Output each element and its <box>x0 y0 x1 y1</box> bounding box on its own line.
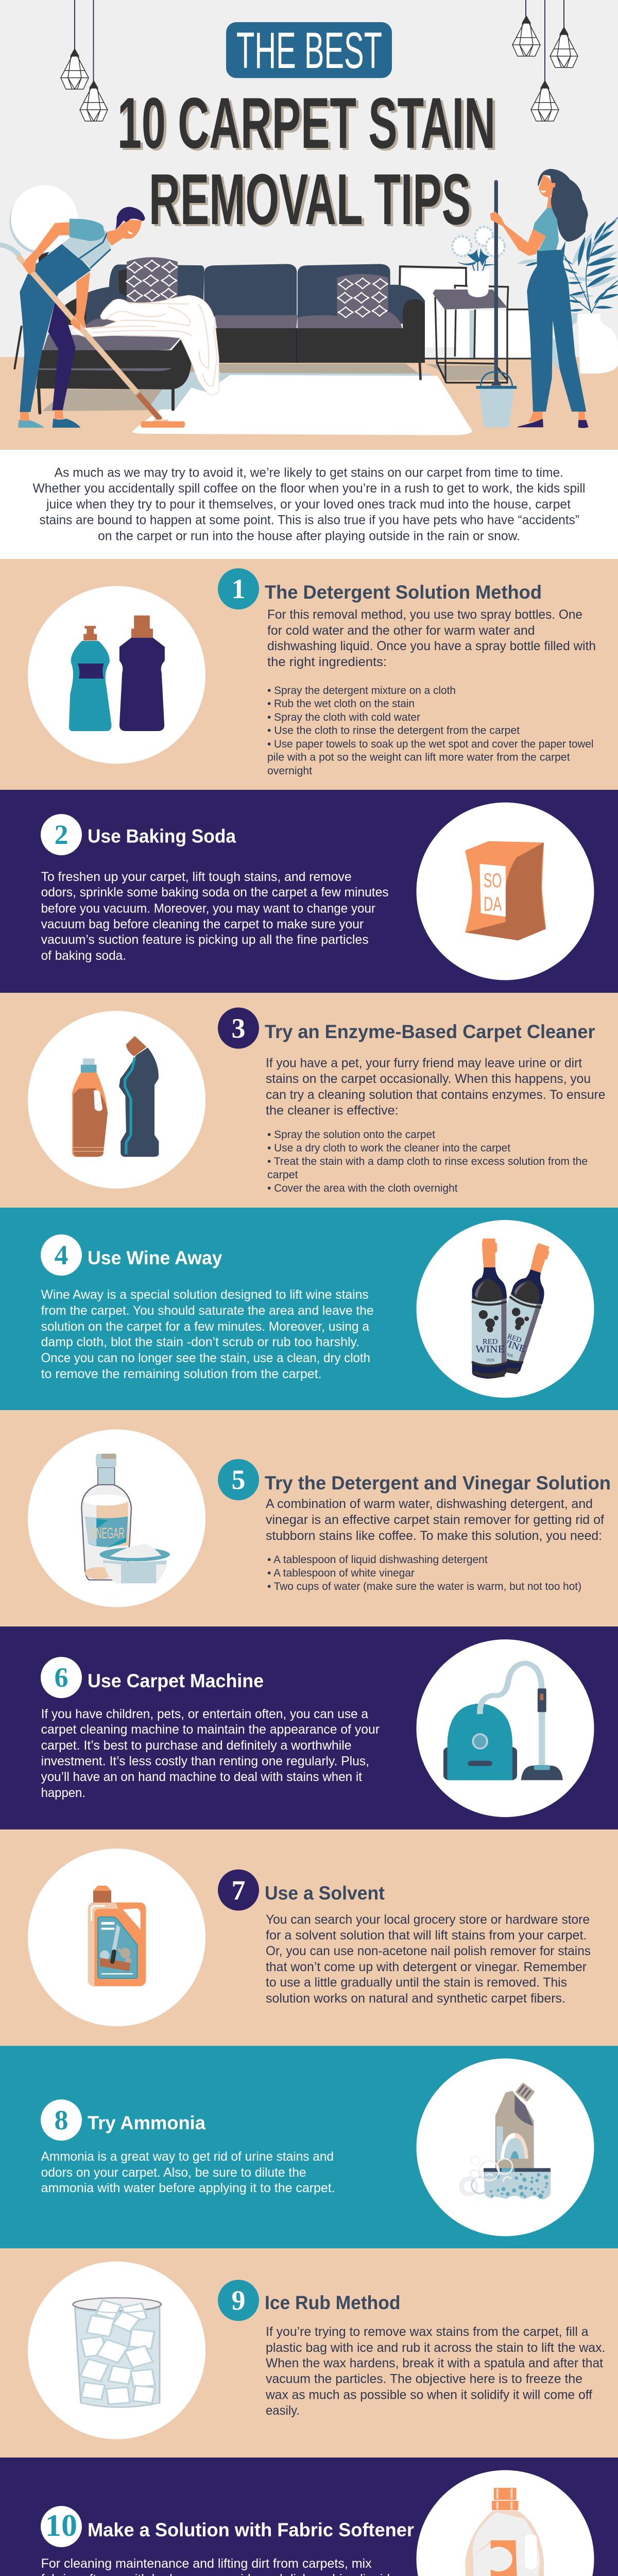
blanket <box>71 295 219 395</box>
body text: If you have a pet, your furry friend may leave urine or dirt <box>266 1056 582 1071</box>
heading: Try Ammonia <box>88 2112 205 2133</box>
pendant lamps <box>61 0 578 121</box>
body text: For this removal method, you use two spray bottles. One <box>267 607 582 622</box>
intro paragraph: on the carpet or run into the house after playing outside in the rain or snow. <box>98 529 520 544</box>
plant <box>517 217 618 374</box>
number badge 6 <box>41 1657 82 1698</box>
body text: solution works on natural and synthetic carpet fibers. <box>266 1991 565 2006</box>
number badge 2: 2 <box>55 819 68 850</box>
body text: odors, sprinkle some baking soda on the carpet a few minutes <box>41 885 389 900</box>
heading: Use a Solvent <box>265 1883 385 1904</box>
body text <box>266 1912 591 2006</box>
body text: to remove the remaining solution from the carpet. <box>41 1367 322 1381</box>
body text: vacuum bag before cleaning the carpet to make sure your <box>41 917 364 931</box>
sofa <box>204 264 425 363</box>
sofa chaise and blanket <box>36 257 237 413</box>
body text: you’ll have an on hand machine to deal with stains when it <box>41 1770 362 1784</box>
body text: of baking soda. <box>41 948 126 963</box>
panel: tip 8 ammonia <box>0 2046 618 2248</box>
number badge 3 <box>218 1008 259 1049</box>
icon: soda box: DA <box>484 892 502 915</box>
icon: glass of ice <box>73 2298 161 2407</box>
body text: to use a little gradually until the stain is removed. This <box>266 1975 567 1990</box>
intro paragraph <box>33 466 585 544</box>
body text: A combination of warm water, dishwashing detergent, and <box>266 1497 593 1511</box>
number badge 10: 10 <box>45 2509 77 2543</box>
bullet list: • Two cups of water (make sure the water is warm, but not too hot) <box>267 1580 581 1592</box>
number badge 7: 7 <box>232 1875 245 1906</box>
panel: tip 5 detergent and vinegar <box>0 1410 618 1626</box>
icon: vacuum cleaner <box>443 1663 563 1780</box>
body text <box>41 2556 397 2576</box>
floor shadows and carpet <box>132 363 472 435</box>
panel: tip 1 detergent solution <box>0 559 618 790</box>
icon: vinegar bottle and bowl: VINEGAR <box>89 1525 125 1542</box>
icon: solvent jug <box>88 1886 146 1986</box>
body text: for a solvent solution that will lift stains from your carpet. <box>266 1928 587 1942</box>
body text: Or, you can use non-acetone nail polish remover for stains <box>266 1944 591 1958</box>
body text: stubborn stains like coffee. To make this solution, you need: <box>266 1529 602 1543</box>
right room furniture: frames, table, plant <box>400 217 618 383</box>
flowers and vase <box>452 227 505 297</box>
title badge: THE BEST <box>226 22 392 79</box>
body text: happen. <box>41 1786 85 1800</box>
right pillow <box>330 274 388 318</box>
body text <box>41 2149 335 2195</box>
hero illustration panel <box>0 0 618 450</box>
body text: If you’re trying to remove wax stains from the carpet, fill a <box>266 2325 589 2339</box>
heading: Ice Rub Method <box>265 2292 401 2313</box>
body text: dishwashing liquid. Once you have a spray bottle filled with <box>267 639 596 653</box>
left pillow <box>126 257 178 304</box>
bullet list: pile with a pot so the weight can lift more water from the carpet <box>267 751 570 764</box>
icon: vinegar bottle and bowl <box>81 1454 170 1583</box>
body text: carpet cleaning machine to maintain the appearance of your <box>41 1722 380 1737</box>
body text <box>265 2325 606 2418</box>
body text: odors on your carpet. Also, be sure to dilute the <box>41 2165 306 2180</box>
panel: tip 2 baking soda <box>0 790 618 993</box>
body text: Once you can no longer see the stain, use a clean, dry cloth <box>41 1351 370 1365</box>
number badge 4: 4 <box>55 1240 68 1270</box>
number badge 1: 1 <box>232 573 245 604</box>
bullet list: carpet <box>267 1168 298 1181</box>
bullet list: • A tablespoon of liquid dishwashing detergent <box>267 1553 488 1566</box>
body text: investment. It’s less costly than renting one regularly. Plus, <box>41 1754 369 1768</box>
side table <box>435 297 507 383</box>
intro paragraph: stains are bound to happen at some point. This is also true if you have pets who have “accidents” <box>39 513 579 528</box>
heading: Use Carpet Machine <box>88 1670 264 1691</box>
body text: stains on the carpet occasionally. When this happens, you <box>266 1072 591 1086</box>
body text: vacuum the particles. The objective here is to freeze the <box>266 2372 582 2386</box>
icon: cleaner bottles <box>72 1036 159 1157</box>
intro paragraph: Whether you accidentally spill coffee on the floor when you’re in a rush to get to work, the kids spill <box>33 481 585 496</box>
heading: Try the Detergent and Vinegar Solution <box>265 1472 611 1494</box>
number badge 6: 6 <box>55 1662 68 1693</box>
bullet list: • Rub the wet cloth on the stain <box>267 698 415 710</box>
body text: When the wax hardens, break it with a spatula and after that <box>266 2356 603 2370</box>
bullet list <box>267 1128 588 1194</box>
panel: tip 6 carpet machine <box>0 1626 618 1829</box>
bullet list: overnight <box>267 765 312 777</box>
heading: Make a Solution with Fabric Softener <box>88 2519 414 2540</box>
number badge 3: 3 <box>232 1013 245 1044</box>
bullet list: • Spray the detergent mixture on a cloth <box>267 684 456 697</box>
number badge 2 <box>41 814 82 855</box>
icon: wine bottles <box>472 1239 560 1379</box>
body text: vacuum’s suction feature is picking up all the fine particles <box>41 933 369 947</box>
panel: tip 7 solvent <box>0 1829 618 2046</box>
number badge 9: 9 <box>232 2285 245 2316</box>
body text <box>267 607 596 669</box>
woman with mop and bucket <box>476 169 589 428</box>
bullet list: • Spray the cloth with cold water <box>267 711 420 723</box>
icon: ammonia bottle and sponge <box>459 2082 551 2199</box>
bullet list: • Use paper towels to soak up the wet spot and cover the paper towel <box>267 738 593 750</box>
number badge 8 <box>41 2099 82 2141</box>
panel: tip 4 wine away <box>0 1208 618 1410</box>
panel: tip 3 enzyme cleaner <box>0 993 618 1208</box>
body text: You can search your local grocery store or hardware store <box>266 1912 590 1927</box>
body text <box>41 1287 374 1381</box>
number badge 5: 5 <box>232 1464 245 1495</box>
intro paragraph: juice when they try to pour it themselves, or your loved ones track mud into the house, carpet <box>46 497 571 512</box>
body text: ammonia with water before applying it to the carpet. <box>41 2181 335 2195</box>
body text: from the carpet. You should saturate the area and leave the <box>41 1303 374 1318</box>
body text: Wine Away is a special solution designed to lift wine stains <box>41 1287 369 1302</box>
intro paragraph: As much as we may try to avoid it, we’re likely to get stains on our carpet from time to time. <box>55 466 563 480</box>
man with broom <box>18 207 185 428</box>
icon: two detergent bottles <box>69 616 165 731</box>
body text: wax as much as possible so when it solidify it will come off <box>265 2387 592 2402</box>
number badge 10 <box>41 2506 82 2547</box>
heading: Try an Enzyme-Based Carpet Cleaner <box>265 1021 595 1042</box>
number badge 7 <box>218 1869 259 1910</box>
body text: can try a cleaning solution that contains enzymes. To ensure <box>266 1088 606 1102</box>
body text: the cleaner is effective: <box>266 1104 399 1118</box>
number badge 8: 8 <box>55 2105 68 2136</box>
body text: before you vacuum. Moreover, you may want to change your <box>41 902 375 916</box>
bullet list: • Cover the area with the cloth overnight <box>267 1182 458 1194</box>
bullet list: • Use a dry cloth to work the cleaner into the carpet <box>267 1142 510 1154</box>
heading: Use Wine Away <box>88 1247 222 1268</box>
number badge 5 <box>218 1459 259 1500</box>
body text <box>41 1707 380 1800</box>
panel: tip 10 fabric softener <box>0 2458 618 2576</box>
body text: damp cloth, blot the stain -don’t scrub or rub too harshly. <box>41 1335 359 1349</box>
body text: vinegar is an effective carpet stain remover for getting rid of <box>266 1513 604 1527</box>
body text: the right ingredients: <box>267 655 387 669</box>
number badge 1 <box>218 568 259 609</box>
icon: soda box <box>465 841 546 940</box>
icon: soda box: SO <box>484 869 502 891</box>
body text: For cleaning maintenance and lifting dirt from carpets, mix <box>41 2556 372 2571</box>
panel: tip 9 ice rub <box>0 2248 618 2458</box>
body text: solution on the carpet for a few minutes. Moreover, using a <box>41 1319 369 1334</box>
heading: Use Baking Soda <box>88 825 236 847</box>
body text <box>41 870 389 963</box>
bullet list <box>267 684 593 777</box>
bullet list <box>267 1553 581 1592</box>
number badge 4 <box>41 1234 82 1276</box>
bullet list: • A tablespoon of white vinegar <box>267 1567 415 1579</box>
bullet list: • Use the cloth to rinse the detergent from the carpet <box>267 724 520 737</box>
body text: for cold water and the other for warm water and <box>267 623 535 638</box>
body text: Ammonia is a great way to get rid of urine stains and <box>41 2149 334 2164</box>
bullet list: • Spray the solution onto the carpet <box>267 1128 435 1141</box>
body text: carpet. It’s best to purchase and definitely a worthwhile <box>41 1738 352 1753</box>
body text: that won’t come up with detergent or vinegar. Remember <box>266 1960 587 1974</box>
body text <box>266 1056 606 1118</box>
bullet list: • Treat the stain with a damp cloth to rinse excess solution from the <box>267 1155 588 1167</box>
body text: If you have children, pets, or entertain often, you can use a <box>41 1707 368 1721</box>
body text: plastic bag with ice and rub it across the stain to lift the wax. <box>266 2341 606 2355</box>
body text: To freshen up your carpet, lift tough stains, and remove <box>41 870 352 884</box>
title badge: THE BEST: THE BEST <box>236 22 382 79</box>
wall circle and leaf <box>0 185 78 368</box>
body text <box>266 1497 604 1543</box>
icon: fabric softener bottle <box>465 2488 544 2576</box>
heading: The Detergent Solution Method <box>265 582 542 603</box>
body text: easily. <box>266 2403 300 2418</box>
number badge 9 <box>218 2280 259 2321</box>
